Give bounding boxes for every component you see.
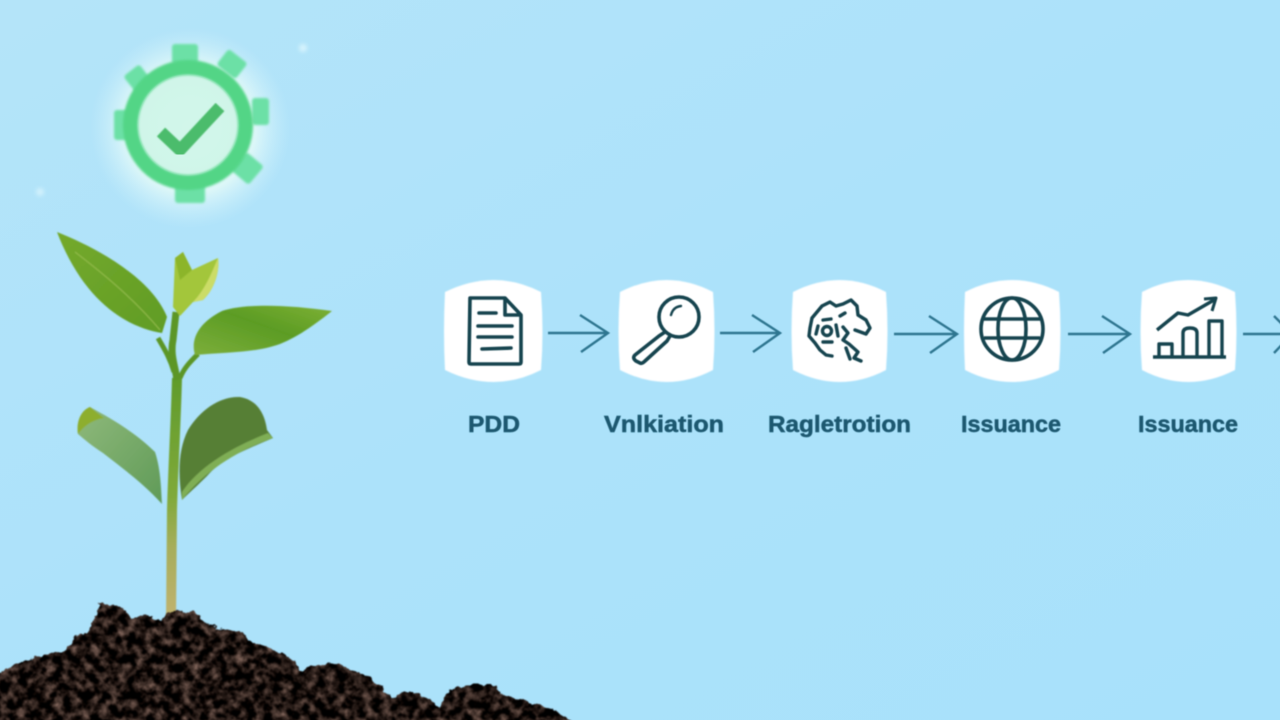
bud leaf: top [173, 252, 218, 316]
icon: magnifier [634, 297, 699, 363]
arrow 1 [548, 315, 608, 352]
panel: validation card [618, 280, 714, 382]
panel: PDD card [444, 280, 542, 382]
soil mound [0, 602, 582, 720]
panel: issuance card two [1140, 280, 1236, 382]
plant seedling [57, 232, 332, 622]
icon: gear network [809, 300, 870, 361]
arrow 4 [1068, 316, 1130, 353]
panel: registration card [792, 280, 888, 382]
leaf: lower right [180, 397, 273, 500]
icon: globe [981, 298, 1043, 360]
label: registration: Ragletrotion [768, 411, 911, 437]
arrow 2 [720, 315, 780, 352]
icon: rising bar chart [1153, 298, 1226, 357]
step 5: issuance growth [1138, 280, 1238, 437]
step 1: PDD [444, 280, 542, 437]
label: PDD: PDD [468, 411, 520, 437]
icon: green gear with check mark [36, 28, 307, 228]
icon: document [469, 298, 521, 364]
leaf: right [194, 306, 332, 355]
label: validation: Vnlkiation [604, 411, 724, 437]
step 3: registration [768, 280, 911, 437]
stem [171, 378, 177, 622]
step 2: validation [604, 280, 724, 437]
step 4: issuance [961, 280, 1061, 437]
arrow 3 [894, 316, 957, 353]
leaf: upper left [57, 232, 167, 333]
panel: issuance card one [964, 280, 1060, 382]
check mark [161, 107, 220, 150]
label: issuance: Issuance [961, 411, 1061, 437]
leaf: lower left [78, 407, 162, 504]
label: issuance: Issuance [1138, 411, 1238, 437]
arrow 5: continues off page [1243, 316, 1280, 353]
